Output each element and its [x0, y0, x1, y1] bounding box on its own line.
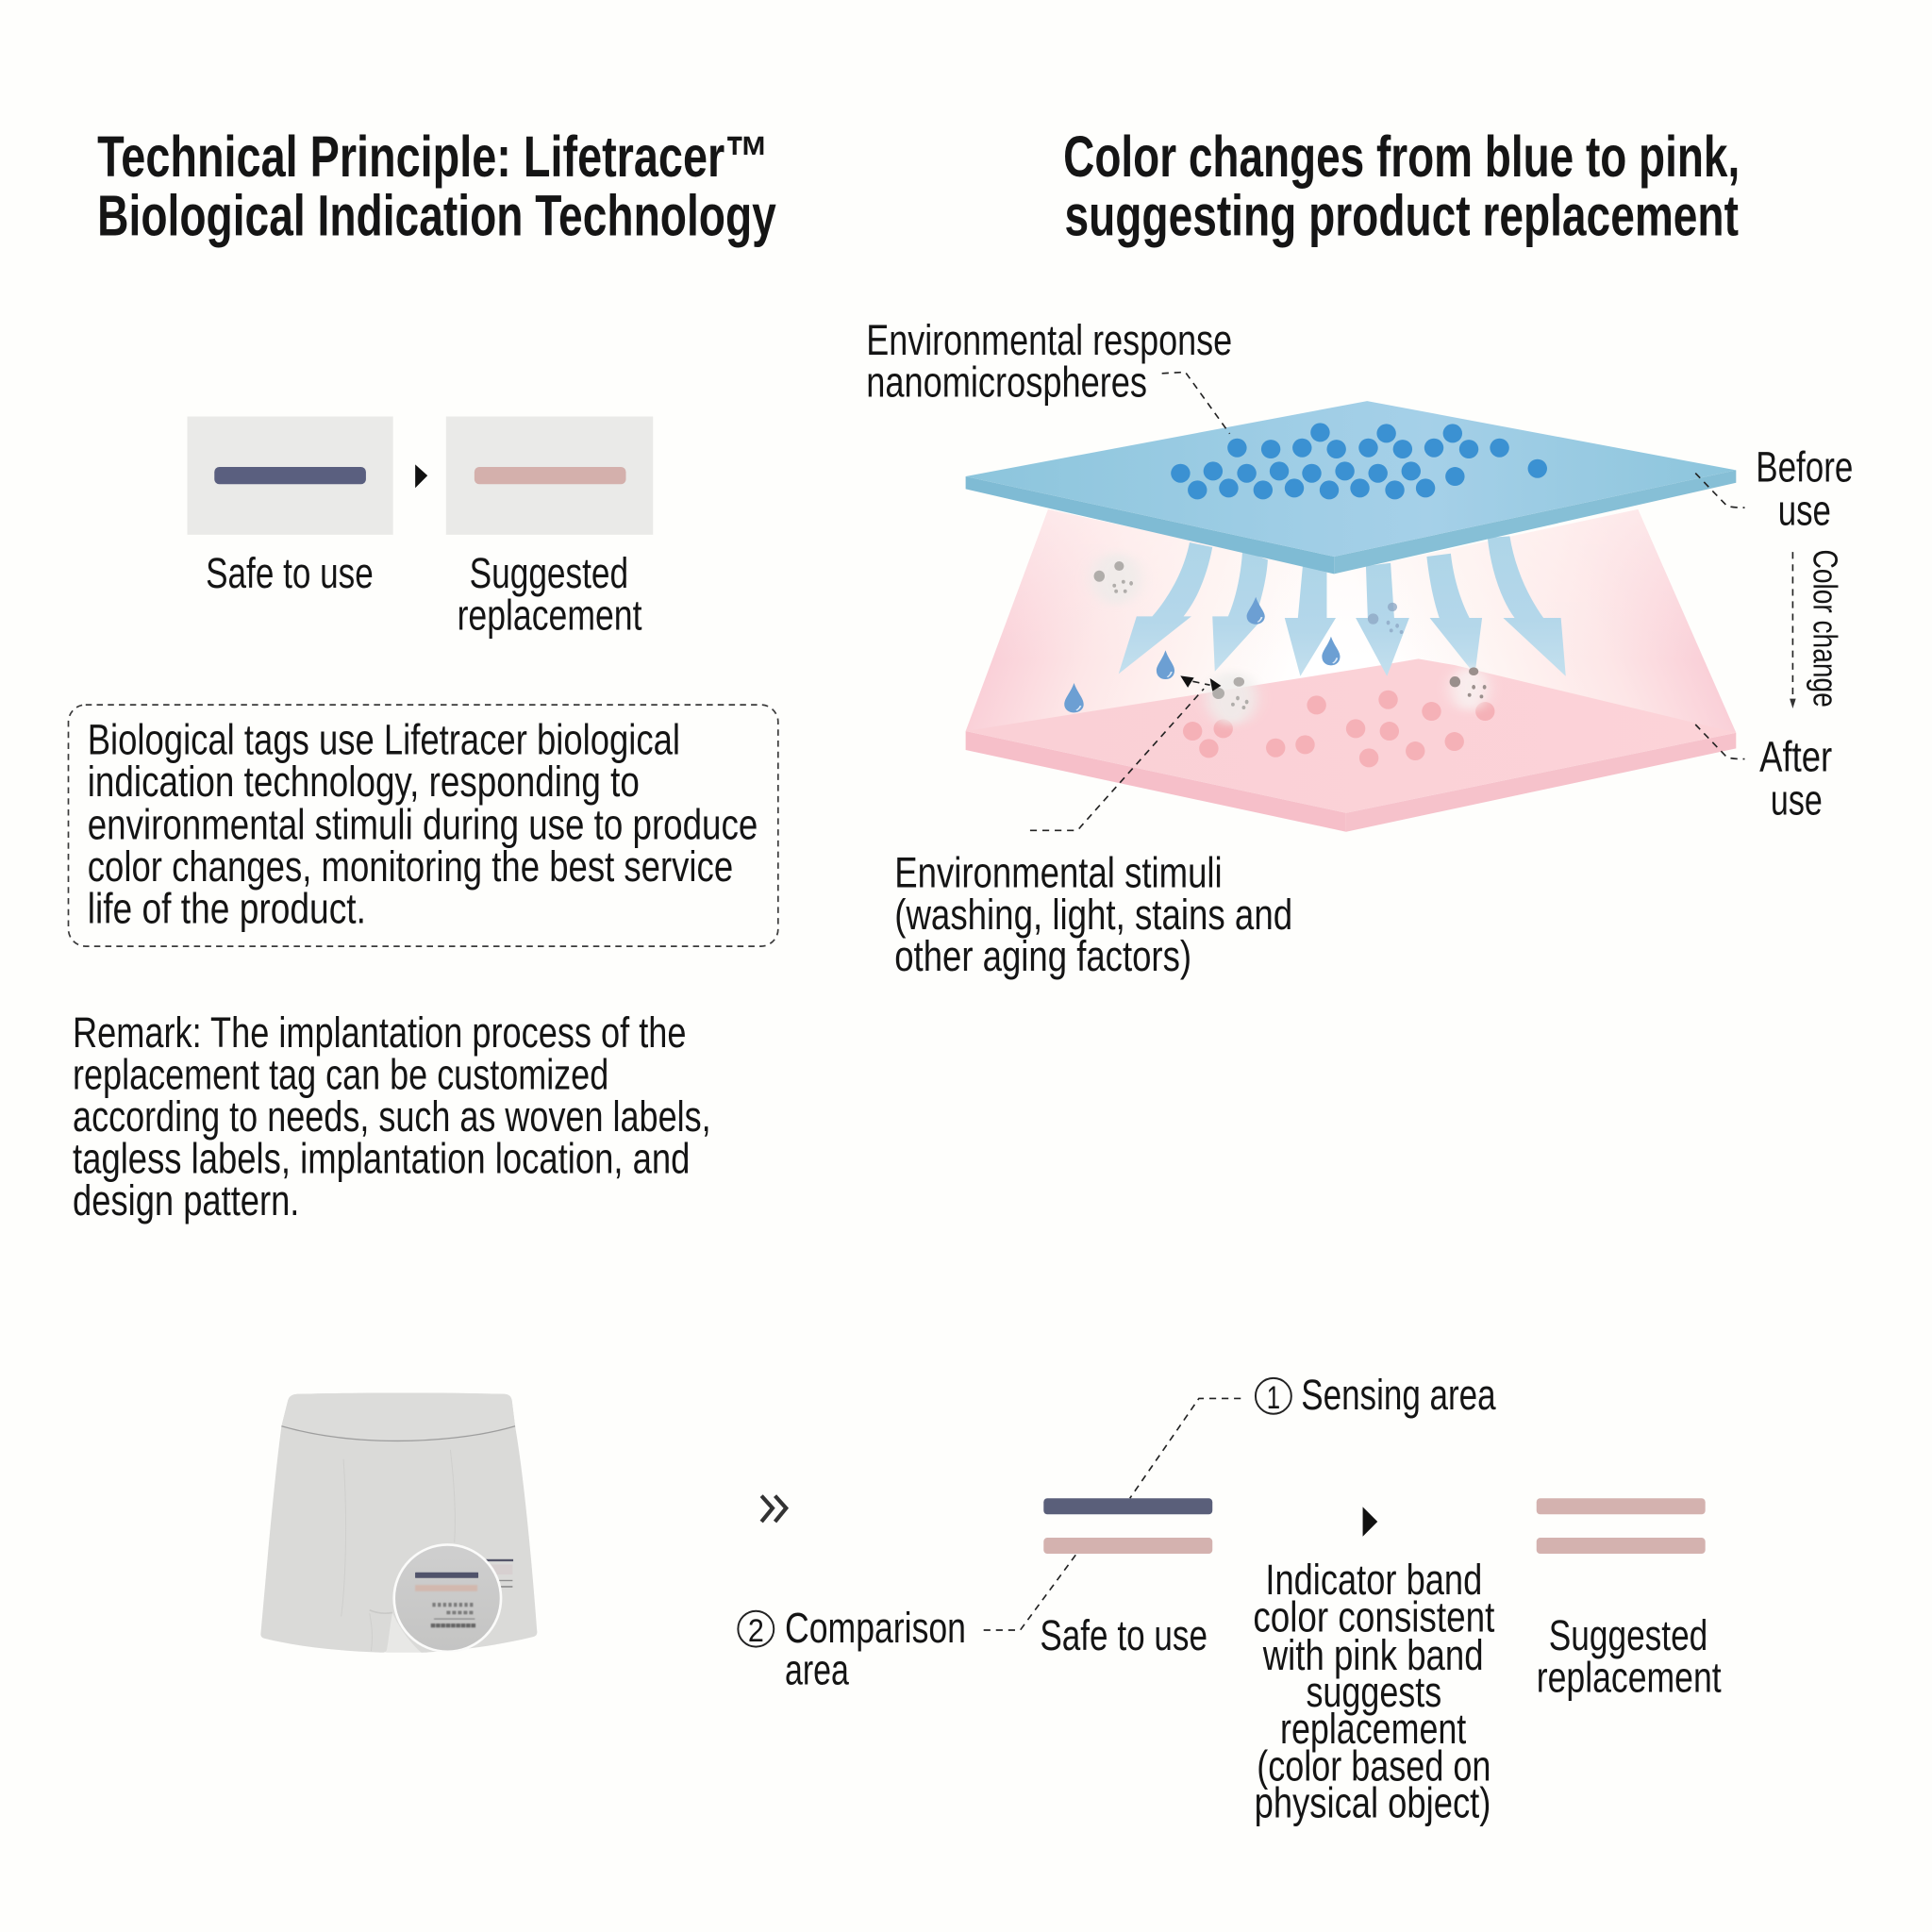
label: suggested replacement: Suggested [1549, 1611, 1707, 1659]
text block: remark: tagless labels, implantation location, and [73, 1134, 690, 1182]
illustration: gray boxer briefs with tag magnifier [260, 1393, 537, 1653]
label: safe to use: Safe to use [1040, 1611, 1208, 1659]
callout: biological tags description: Biological tags use Lifetracer biological [88, 715, 680, 763]
label: after use: After [1759, 733, 1832, 781]
text block: indicator band explanation: Indicator band [1265, 1556, 1482, 1604]
chart: layered color change diagram [966, 401, 1736, 832]
pink plate [966, 658, 1736, 832]
boxer body [260, 1393, 537, 1653]
text block: indicator band explanation: (color based on [1257, 1741, 1491, 1790]
label: sensing area [1256, 1371, 1496, 1419]
text block: remark [73, 1008, 711, 1224]
text block: indicator band explanation: with pink band [1262, 1631, 1484, 1679]
icons: water droplets [1064, 597, 1340, 712]
leader: before use [1695, 474, 1744, 508]
indicator bands: suggested replacement [1537, 1498, 1706, 1554]
indicator bands: safe to use [1043, 1498, 1212, 1554]
title: technical principle: Technical Principle: Lifetracer™ [97, 125, 769, 190]
pink wall right [1340, 509, 1736, 733]
label: comparison area: 2 [748, 1613, 764, 1649]
tag swatch: suggested replacement [446, 416, 653, 535]
label: before use: Before [1756, 443, 1853, 491]
label: environmental stimuli [894, 848, 1292, 980]
callout: biological tags description: life of the product. [88, 884, 366, 932]
label: after use [1759, 733, 1832, 824]
title: color change [1063, 125, 1740, 248]
blue plate [966, 401, 1736, 574]
text block: indicator band explanation: suggests [1306, 1668, 1441, 1716]
callout: biological tags description: indication technology, responding to [88, 758, 640, 806]
callout: biological tags description: environmental stimuli during use to produce [88, 800, 758, 848]
pink wall left [966, 509, 1346, 731]
leader: environmental stimuli [1030, 675, 1221, 830]
small tag on fabric [484, 1559, 513, 1588]
crotch fold [370, 1610, 392, 1613]
shadow between legs [385, 1613, 427, 1653]
label: environmental response nanomicrospheres [866, 316, 1232, 407]
panel: tag state comparison [188, 416, 653, 639]
label: before use [1756, 443, 1853, 534]
label: before use: use [1778, 486, 1831, 534]
label: comparison area: Comparison [785, 1604, 966, 1652]
label: suggested replacement: replacement [1537, 1653, 1722, 1701]
icons: stain particles [1091, 553, 1489, 724]
blue spheres [1171, 423, 1547, 499]
text block: remark: replacement tag can be customized [73, 1051, 608, 1099]
leader: comparison area [981, 1555, 1075, 1630]
arrows: downward flow [1119, 536, 1566, 676]
title: technical principle [97, 125, 776, 248]
waistband [281, 1393, 515, 1441]
title: technical principle: Biological Indication Technology [97, 183, 776, 248]
tag swatch: safe to use [188, 416, 393, 535]
waistband seam [281, 1426, 515, 1441]
text block: remark: Remark: The implantation process of the [73, 1008, 687, 1057]
label: after use: use [1771, 775, 1823, 824]
side seams [341, 1450, 455, 1651]
magnified tag text lines [431, 1605, 475, 1625]
arrow: band transition [1363, 1507, 1377, 1537]
label: sensing area: Sensing area [1301, 1371, 1496, 1419]
text block: indicator band explanation [1253, 1556, 1495, 1827]
label: color change: Color change [1807, 550, 1845, 708]
label: suggested replacement [1537, 1611, 1722, 1701]
arrow: color change direction [1790, 552, 1796, 708]
label: safe to use: Safe to use [206, 549, 374, 597]
label: environmental stimuli: other aging factors) [894, 932, 1191, 980]
leader: after use [1695, 724, 1744, 759]
label: comparison area [738, 1604, 966, 1693]
text block: remark: according to needs, such as woven labels, [73, 1092, 711, 1141]
text block: indicator band explanation: replacement [1280, 1705, 1467, 1753]
pink spheres [1183, 691, 1494, 767]
label: environmental response nanomicrospheres: Environmental response [866, 316, 1232, 364]
label: suggested replacement: replacement [458, 591, 642, 639]
label: environmental response nanomicrospheres: nanomicrospheres [866, 358, 1147, 407]
label: environmental stimuli: (washing, light, stains and [894, 891, 1292, 939]
text block: remark: design pattern. [73, 1176, 299, 1224]
callout: biological tags description: color changes, monitoring the best service [88, 842, 733, 891]
label: comparison area: area [785, 1645, 849, 1693]
text block: indicator band explanation: color consistent [1253, 1592, 1495, 1641]
label: suggested replacement [458, 549, 642, 639]
magnified sensing band [415, 1573, 478, 1578]
arrow: safe to suggested [415, 464, 427, 488]
leader: nanomicrospheres [1162, 372, 1230, 434]
magnified comparison band [415, 1585, 477, 1591]
label: suggested replacement: Suggested [470, 549, 628, 597]
text block: indicator band explanation: physical object) [1255, 1779, 1491, 1827]
magnifier circle [394, 1544, 501, 1652]
icon: double chevron [761, 1496, 786, 1522]
leader: sensing area [1130, 1398, 1241, 1498]
callout: biological tags description [68, 705, 778, 946]
label: sensing area: 1 [1267, 1380, 1280, 1416]
label: environmental stimuli: Environmental stimuli [894, 848, 1223, 896]
